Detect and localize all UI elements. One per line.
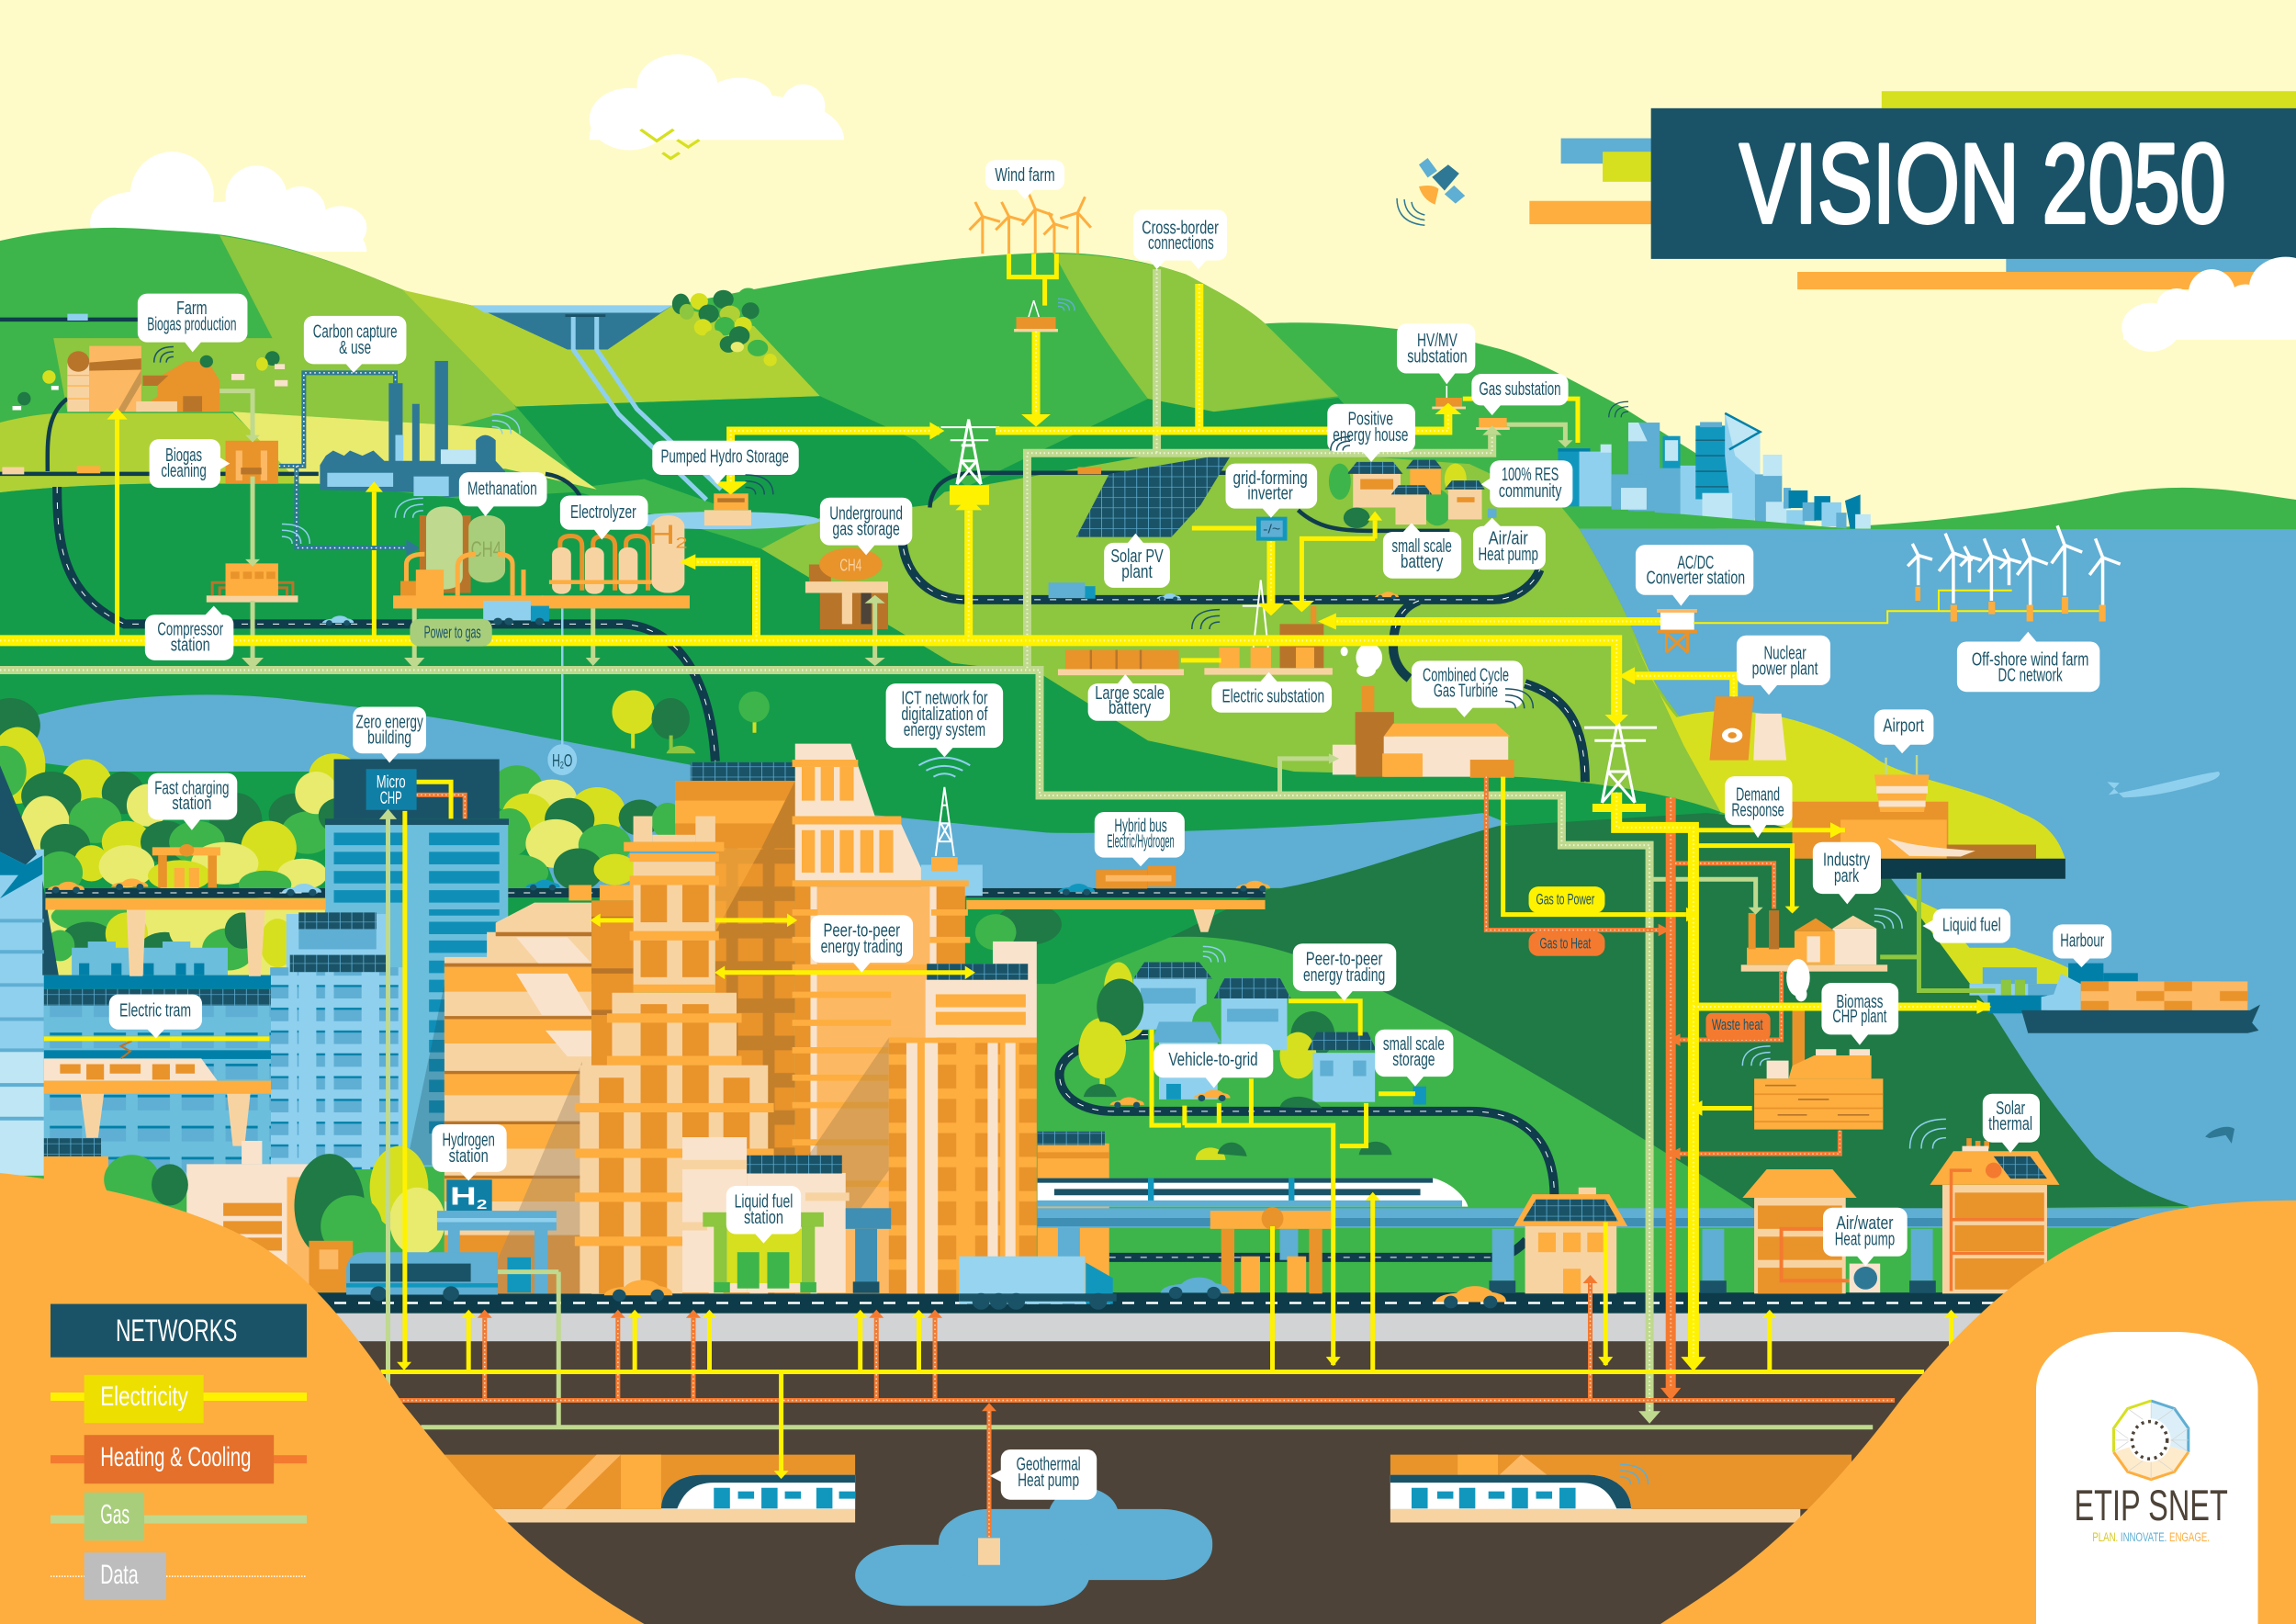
compressor station	[207, 563, 298, 603]
callout: underground gas storage: Underground	[829, 503, 903, 524]
electrolyzer	[542, 515, 690, 608]
callout: biomass chp plant	[1821, 983, 1898, 1045]
callout: electric substation: Electric substation	[1222, 686, 1324, 706]
legend: networks	[51, 1304, 307, 1600]
logo wordmark: PLAN. INNOVATE. ENGAGE.	[2092, 1530, 2210, 1544]
label: H2O	[547, 744, 577, 775]
airport	[1793, 755, 2065, 879]
blue mid-rise buildings	[44, 912, 404, 1177]
callout: pumped hydro storage: Pumped Hydro Storage	[660, 446, 789, 467]
callout: compressor station: station	[171, 636, 210, 656]
callout: 100% RES community: community	[1499, 481, 1562, 502]
field: pale yellow	[233, 412, 597, 490]
callout: peer-to-peer city: Peer-to-peer	[823, 920, 900, 941]
legend: heating and cooling	[51, 1435, 307, 1483]
callout: compressor station	[145, 606, 233, 660]
callout: grid-forming inverter: inverter	[1247, 483, 1293, 503]
truck east	[1049, 468, 1399, 601]
callout: hv/mv substation	[1397, 323, 1475, 384]
elevated rail viaduct	[846, 1208, 2187, 1293]
hill: mid green	[516, 396, 1391, 528]
methanation plant: CH4	[471, 538, 501, 562]
callout: positive energy house: energy house	[1333, 425, 1408, 445]
hydro penstocks	[573, 317, 721, 500]
trees: woods by hill	[672, 288, 777, 367]
river	[29, 694, 1508, 888]
farm	[13, 346, 287, 412]
callout: carbon capture: & use	[339, 338, 371, 358]
roads	[0, 320, 1585, 1257]
callout: large scale battery: battery	[1109, 698, 1152, 718]
callout: nuclear power plant: power plant	[1752, 659, 1818, 679]
callout: air/water heat pump: Heat pump	[1835, 1229, 1895, 1249]
callout: demand response	[1725, 776, 1793, 838]
callout: peer-to-peer neighbourhood	[1293, 943, 1396, 1001]
cloud right	[2122, 257, 2296, 352]
legend: data	[51, 1552, 307, 1600]
orange tower west	[445, 885, 634, 1294]
text: Power to gas	[424, 623, 481, 642]
callout: positive energy house: Positive	[1348, 409, 1393, 429]
callouts: city	[109, 812, 1185, 1500]
callout: liquid fuel station: Liquid fuel	[735, 1192, 793, 1212]
callout: air/air heat pump: Heat pump	[1479, 545, 1538, 565]
network: data	[279, 373, 420, 556]
legend: electricity	[51, 1375, 307, 1423]
callout: solar pv plant	[1104, 534, 1170, 588]
corner: left orange	[0, 1173, 645, 1624]
reservoir dam	[472, 306, 820, 529]
callout: vehicle-to-grid: Vehicle-to-grid	[1168, 1050, 1258, 1070]
corner: right orange	[1660, 1201, 2296, 1624]
bus	[346, 1252, 498, 1301]
callout: small scale storage: storage	[1392, 1050, 1435, 1070]
callout: electric substation	[1211, 672, 1332, 713]
callout: biogas cleaning: Biogas	[165, 445, 202, 466]
callout: harbour	[2053, 924, 2111, 967]
legend: electricity: Electricity	[100, 1382, 188, 1412]
callout: liquid fuel: Liquid fuel	[1942, 916, 2001, 936]
high speed train	[1038, 1179, 1468, 1207]
callouts: north east	[1211, 323, 2099, 838]
callout: airport: Airport	[1883, 716, 1924, 737]
callout: ICT network: ICT network for	[901, 689, 987, 709]
callout: 100% RES community: 100% RES	[1502, 465, 1559, 485]
callout: biomass chp plant: CHP plant	[1832, 1007, 1886, 1027]
network: gas	[0, 269, 1873, 1427]
callout: airport	[1874, 709, 1933, 753]
land base	[0, 228, 2189, 1315]
foreground cars	[604, 1280, 1506, 1308]
truck foreground	[959, 1257, 1117, 1310]
legend heading	[51, 1304, 307, 1358]
callout: demand response: Response	[1731, 800, 1784, 820]
micro CHP zero energy tower: Micro	[377, 772, 406, 792]
callout: electric tram: Electric tram	[119, 1001, 191, 1021]
south east objects: industry park	[1741, 910, 1887, 972]
dolphin	[2205, 1127, 2234, 1144]
callout: positive energy house	[1327, 404, 1415, 462]
electrolyzer: H	[647, 520, 675, 549]
callout: fast charging station: station	[172, 794, 211, 814]
land: central light green	[761, 453, 1720, 812]
transmission pylon	[940, 420, 999, 505]
callout: off-shore wind farm	[1957, 632, 2099, 692]
biomass chp plant	[1754, 959, 1883, 1130]
icons: wireless signals west	[282, 299, 1075, 544]
trees: cluster right of tower	[486, 765, 1062, 951]
battery storage	[1058, 650, 1184, 675]
biogas cleaning unit	[226, 441, 278, 483]
lower left peach building	[44, 1138, 445, 1293]
callout: solar thermal	[1983, 1094, 2040, 1153]
callout: small scale storage: small scale	[1383, 1034, 1445, 1054]
liquid fuel line	[1880, 873, 1995, 991]
callout: industry park: park	[1834, 866, 1859, 886]
electric substation	[1204, 580, 1333, 675]
callout: wind farm: Wind farm	[995, 165, 1055, 186]
callout: liquid fuel station	[726, 1186, 801, 1244]
hydrogen station: 2	[477, 1197, 487, 1212]
callout: large scale battery: Large scale	[1095, 683, 1165, 704]
callout: geothermal heat pump: Heat pump	[1018, 1471, 1079, 1491]
callout: ICT network	[886, 683, 1003, 757]
callout: cross-border connections	[1133, 209, 1227, 269]
callout: ICT network: energy system	[904, 720, 985, 740]
legend heading: NETWORKS	[116, 1314, 237, 1348]
gas station east	[1161, 1207, 1331, 1299]
orange tower centre	[575, 817, 774, 1293]
wind farm turbines	[969, 192, 1091, 254]
text: Electric/Hydrogen	[1107, 831, 1175, 851]
nuclear power plant	[1709, 696, 1786, 761]
callout: hv/mv substation: HV/MV	[1417, 331, 1458, 351]
ground: pavement	[0, 1314, 2296, 1341]
callout: air/water heat pump	[1823, 1208, 1908, 1266]
wind farm substation	[1014, 300, 1058, 332]
micro CHP zero energy tower: CHP	[380, 788, 402, 807]
callout: solar pv plant: plant	[1121, 562, 1153, 582]
callout: farm: Farm	[176, 299, 208, 319]
callout: gas substation	[1471, 374, 1569, 415]
west tunnel with metro	[443, 1455, 855, 1523]
logo card	[2036, 1332, 2258, 1624]
callout: electric tram	[109, 994, 202, 1038]
callouts: south east	[1154, 842, 2111, 1266]
callout: zero energy building: building	[367, 727, 411, 748]
callout: underground gas storage: gas storage	[832, 519, 900, 539]
tags: gas to power, gas to heat, waste heat: Gas to Heat	[1539, 935, 1591, 952]
callout: solar pv plant: Solar PV	[1110, 547, 1164, 567]
label: power to gas	[410, 619, 492, 647]
callout: methanation: Methanation	[467, 479, 537, 499]
trees in loop	[1078, 979, 1144, 1108]
callout: carbon capture	[304, 316, 406, 373]
callout: nuclear power plant	[1737, 636, 1830, 695]
callout: biomass chp plant: Biomass	[1836, 992, 1883, 1012]
hill: lime slope	[402, 290, 820, 407]
solar pv plant	[1076, 453, 1232, 537]
offshore wind farm	[1694, 525, 2121, 623]
harbour and ship	[1969, 964, 2260, 1033]
brown tall tower	[675, 762, 795, 1293]
plane	[2107, 772, 2220, 797]
callouts: north west: Biogas production	[147, 315, 236, 335]
callout: zero energy building	[353, 707, 426, 762]
field: lime mound	[0, 413, 306, 492]
callout: cross-border connections: Cross-border	[1142, 218, 1219, 238]
label: H2O: H	[552, 750, 570, 770]
callout: fast charging station	[148, 773, 237, 830]
truck and car	[2, 314, 549, 626]
callout: hv/mv substation: substation	[1407, 346, 1468, 367]
callout: 100% RES community	[1481, 460, 1572, 507]
callout: cross-border connections: connections	[1148, 233, 1214, 254]
hydrogen station: H	[450, 1182, 477, 1211]
air/water heat pump building	[1742, 1169, 1880, 1293]
cloud left	[89, 152, 366, 254]
callout: nuclear power plant: Nuclear	[1763, 644, 1806, 664]
callout: peer-to-peer city	[810, 915, 913, 973]
hv/mv and gas substations	[1432, 386, 1510, 430]
callout: off-shore wind farm: Off-shore wind farm	[1972, 649, 2088, 670]
callout: ac/dc converter station	[1636, 545, 1753, 606]
hydrogen station	[437, 1179, 557, 1293]
callout: liquid fuel	[1922, 908, 2010, 943]
orange tower south east	[889, 942, 1037, 1293]
right low building	[1038, 1132, 1109, 1293]
callout: solar thermal: thermal	[1988, 1114, 2032, 1134]
east tunnel with metro	[1390, 1455, 1851, 1523]
callout: small scale battery: small scale	[1391, 536, 1452, 557]
callout: hydrogen station	[432, 1124, 507, 1180]
arrowheads: gas	[242, 425, 1763, 1424]
callout: air/air heat pump: Air/air	[1489, 528, 1528, 548]
callouts: north west: Zero energy	[355, 713, 423, 733]
callout: hybrid bus	[1095, 812, 1185, 866]
micro CHP zero energy tower	[325, 759, 509, 1167]
birds	[641, 130, 699, 159]
legend: heating and cooling: Heating & Cooling	[100, 1442, 251, 1472]
methanation plant	[393, 506, 544, 608]
tags: gas to power, gas to heat, waste heat	[1529, 886, 1771, 1040]
callout: grid-forming inverter: grid-forming	[1232, 468, 1308, 489]
sea	[1537, 529, 2296, 1305]
callout: hydrogen station: station	[449, 1146, 489, 1167]
inverter	[1256, 517, 1287, 541]
electric tram	[44, 1041, 271, 1146]
callout: pumped hydro storage	[652, 441, 799, 484]
trees: west city cluster	[0, 698, 363, 976]
positive energy house community	[1329, 460, 1496, 528]
ac/dc converter	[1657, 609, 1697, 652]
callout: methanation	[459, 472, 547, 516]
callout: fast charging station: Fast charging	[154, 778, 230, 798]
solar thermal building	[1930, 1138, 2060, 1293]
underground gas storage: CH4	[839, 556, 861, 574]
fast charging station	[48, 844, 560, 896]
callout: large scale battery	[1088, 674, 1170, 721]
callout: hybrid bus: Hybrid bus	[1114, 816, 1167, 836]
callout: air/air heat pump	[1473, 518, 1546, 570]
callout: ICT network: digitalization of	[901, 705, 987, 725]
callout: electrolyzer: Electrolyzer	[570, 502, 636, 523]
geothermal reservoir	[855, 1488, 1212, 1606]
solar house	[1514, 1188, 1627, 1293]
callout: air/water heat pump: Air/water	[1836, 1213, 1894, 1234]
carbon capture plant	[320, 361, 505, 497]
lowland deep green	[0, 484, 1720, 984]
callout: small scale battery: battery	[1401, 552, 1444, 572]
arrowheads: electricity	[107, 403, 1991, 1479]
skyline foreground shore	[1561, 506, 1849, 529]
callout: peer-to-peer neighbourhood: energy trading	[1303, 965, 1385, 986]
logo emblem	[2113, 1401, 2189, 1480]
callout: ac/dc converter station: Converter station	[1646, 568, 1745, 588]
tags: gas to power, gas to heat, waste heat: Gas to Power	[1536, 891, 1594, 908]
south pylon	[1584, 720, 1657, 812]
houses and vehicle-to-grid	[1079, 962, 1426, 1160]
callout: farm	[138, 294, 247, 352]
callout: industry park	[1813, 842, 1881, 904]
water pipe	[561, 608, 563, 750]
callout: combined cycle gas turbine: Gas Turbine	[1434, 681, 1498, 701]
callout: solar thermal: Solar	[1996, 1099, 2025, 1119]
icons: wireless signals east	[1192, 436, 1533, 708]
orange tower east	[793, 744, 983, 1293]
callout: peer-to-peer neighbourhood: Peer-to-peer	[1306, 949, 1383, 969]
land: harbour lime	[1905, 894, 2103, 984]
hill: wind farm slope	[1054, 254, 1338, 412]
hill: light green west	[53, 236, 516, 425]
callout: harbour: Harbour	[2060, 930, 2104, 951]
callout: combined cycle gas turbine	[1412, 660, 1523, 717]
callout: hydrogen station: Hydrogen	[443, 1130, 495, 1151]
ground: road	[0, 1292, 2296, 1314]
land: dark south hill	[1170, 813, 2189, 1211]
cloud centre	[590, 54, 844, 150]
callout: liquid fuel station: station	[744, 1208, 783, 1228]
label: H2O: 2	[560, 760, 564, 771]
legend: gas	[51, 1493, 307, 1540]
callouts: north west	[138, 160, 1227, 830]
ground: earth	[0, 1341, 2296, 1624]
skyline	[1558, 401, 1871, 529]
icon: satellite	[1397, 158, 1465, 225]
callout: carbon capture: Carbon capture	[313, 321, 397, 342]
far hill	[1757, 488, 2296, 529]
callout: small scale battery	[1383, 523, 1461, 579]
callout: wind farm	[985, 160, 1064, 199]
liquid fuel station	[678, 1137, 850, 1292]
callout: gas substation: Gas substation	[1479, 379, 1561, 400]
callout: biogas cleaning: cleaning	[161, 461, 207, 481]
callout: geothermal heat pump	[990, 1449, 1097, 1500]
pumped hydro unit	[704, 493, 751, 525]
network: heating and cooling	[399, 777, 1895, 1537]
callout: combined cycle gas turbine: Combined Cycle	[1423, 665, 1509, 685]
label: H2O: O	[564, 750, 572, 770]
callout: peer-to-peer city: energy trading	[821, 937, 903, 957]
elevated road east and bus	[966, 866, 1270, 932]
callout: biogas cleaning	[150, 439, 230, 488]
tags: gas to power, gas to heat, waste heat: Waste heat	[1712, 1016, 1763, 1033]
icons: wireless signals south east	[1203, 908, 1946, 1148]
legend: gas: Gas	[100, 1499, 129, 1529]
callout: vehicle-to-grid	[1154, 1044, 1273, 1088]
arrowheads: heating	[478, 924, 1681, 1411]
underground gas storage	[805, 547, 888, 629]
network: electricity	[0, 254, 1990, 1476]
callout: grid-forming inverter	[1226, 464, 1317, 518]
inverter: -/~	[1263, 522, 1280, 536]
telecom mast	[931, 787, 958, 871]
callout: compressor station: Compressor	[157, 620, 223, 640]
callout: industry park: Industry	[1823, 850, 1870, 871]
callout: geothermal heat pump: Geothermal	[1017, 1454, 1081, 1474]
callout: ac/dc converter station: AC/DC	[1677, 553, 1714, 573]
callout: electrolyzer	[560, 496, 648, 539]
icon: ICT signal	[918, 758, 970, 777]
callout: demand response: Demand	[1736, 784, 1780, 805]
icon: free trees	[612, 691, 770, 753]
land: lime island	[1628, 626, 2065, 865]
logo wordmark	[2074, 1483, 2228, 1544]
left glass tower	[0, 765, 59, 1176]
elevated road deck	[45, 898, 326, 976]
title banner bars	[1529, 91, 2296, 289]
electrolyzer: 2	[675, 535, 688, 552]
callout: underground gas storage	[820, 498, 912, 555]
callout: small scale storage	[1375, 1030, 1453, 1087]
callout: off-shore wind farm: DC network	[1998, 665, 2063, 685]
legend: data: Data	[100, 1560, 139, 1590]
combined cycle gas turbine	[1333, 643, 1514, 778]
